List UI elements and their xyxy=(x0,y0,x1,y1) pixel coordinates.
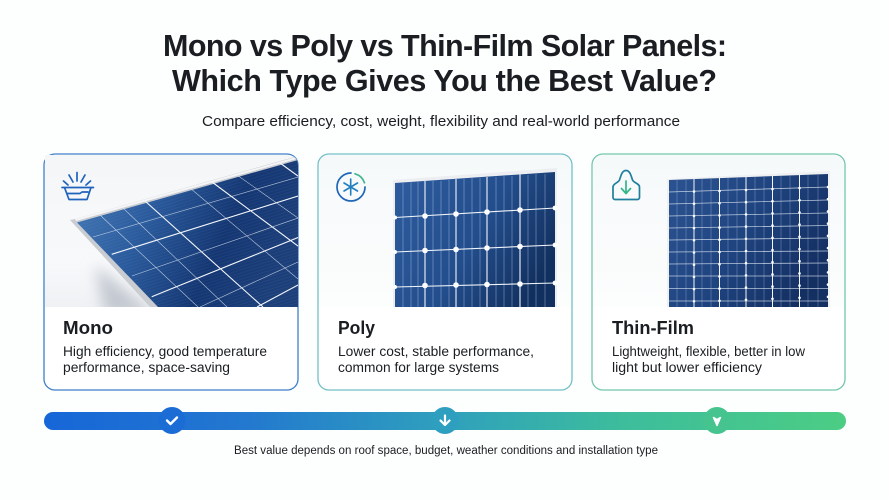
title: Mono vs Poly vs Thin-Film Solar Panels: xyxy=(163,29,727,63)
thin-film description: light but lower efficiency xyxy=(612,360,762,375)
panel: poly xyxy=(318,154,572,390)
footer note: Best value depends on roof space, budget, weather conditions and installation type xyxy=(234,445,658,457)
panel: thin-film xyxy=(592,154,845,390)
title: Which Type Gives You the Best Value? xyxy=(172,64,717,98)
mono description xyxy=(63,344,267,375)
title xyxy=(163,29,727,98)
marker: down arrow xyxy=(432,407,458,434)
icon: house with down arrow xyxy=(613,170,640,200)
marker: heart check xyxy=(704,407,730,434)
icon: sun over tray xyxy=(62,172,94,200)
mono heading: Mono xyxy=(63,318,113,338)
icon: circular snowflake xyxy=(337,173,365,201)
mono description: High efficiency, good temperature xyxy=(63,344,267,359)
marker: check xyxy=(158,407,186,434)
thin-film description: Lightweight, flexible, better in low xyxy=(612,344,805,359)
poly panel image xyxy=(319,155,571,307)
thin-film description xyxy=(612,344,805,375)
thin-film heading: Thin-Film xyxy=(612,318,694,338)
gradient progress bar xyxy=(44,407,846,434)
mono description: performance, space-saving xyxy=(63,360,230,375)
thin-film panel image xyxy=(593,155,844,307)
poly description: Lower cost, stable performance, xyxy=(338,344,534,359)
subtitle: Compare efficiency, cost, weight, flexibility and real-world performance xyxy=(202,113,680,130)
infographic canvas xyxy=(43,34,846,456)
panel: mono xyxy=(44,154,298,390)
poly heading: Poly xyxy=(338,318,375,338)
mono panel image xyxy=(45,155,298,315)
poly description xyxy=(338,344,534,375)
poly description: common for large systems xyxy=(338,360,499,375)
